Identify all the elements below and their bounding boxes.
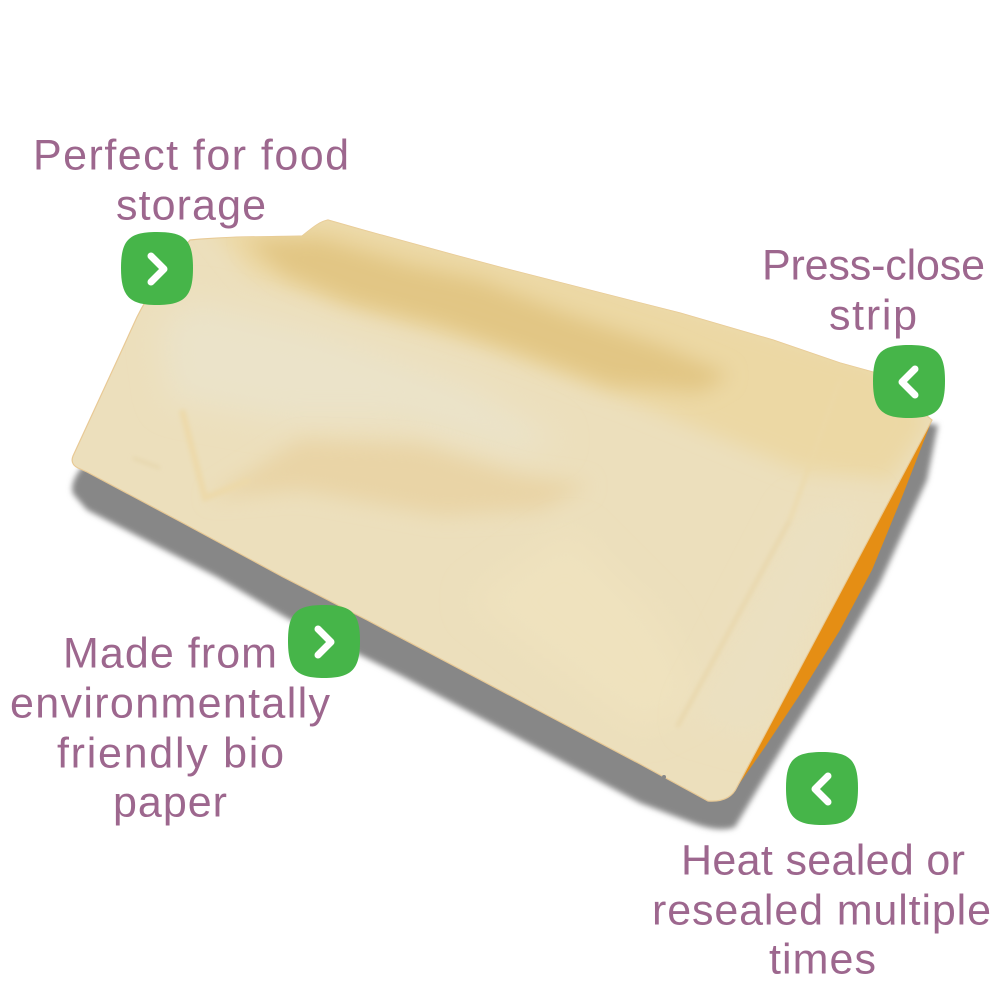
label: heat sealed or resealed multiple times: times [769,936,876,984]
label: made from environmentally friendly bio paper: paper [113,778,227,826]
button: lower left [288,605,360,678]
shading: dark fold [245,238,730,392]
bag front [72,215,932,801]
button: top left [121,232,193,305]
label: perfect for food storage: Perfect for food [33,132,349,180]
button: bottom right [786,752,858,825]
bag shadow [72,420,938,829]
label: made from environmentally friendly bio paper: Made from [63,630,277,678]
label: made from environmentally friendly bio paper [10,630,330,826]
bag gusset: orange side [737,420,932,787]
shading: lower tone [470,530,700,730]
label: perfect for food storage: storage [116,182,266,230]
tear notch [662,775,666,779]
shading: top band [210,215,930,480]
label: press-close strip: Press-close [762,242,985,290]
label: heat sealed or resealed multiple times: resealed multiple [652,886,991,934]
shading: light centre [170,311,526,443]
button: top right [873,345,945,418]
shading: seal light tone [758,556,860,746]
shading: left triangular crease [180,410,229,501]
seal crease lines [677,520,790,727]
label: press-close strip [762,242,985,340]
label: press-close strip: strip [829,292,917,340]
shading: lower centre fold [208,440,590,515]
label: made from environmentally friendly bio paper: environmentally [10,680,330,728]
label: heat sealed or resealed multiple times: Heat sealed or [681,836,965,884]
label: perfect for food storage [33,132,349,230]
label: heat sealed or resealed multiple times [652,836,991,984]
label: made from environmentally friendly bio paper: friendly bio [57,730,284,778]
